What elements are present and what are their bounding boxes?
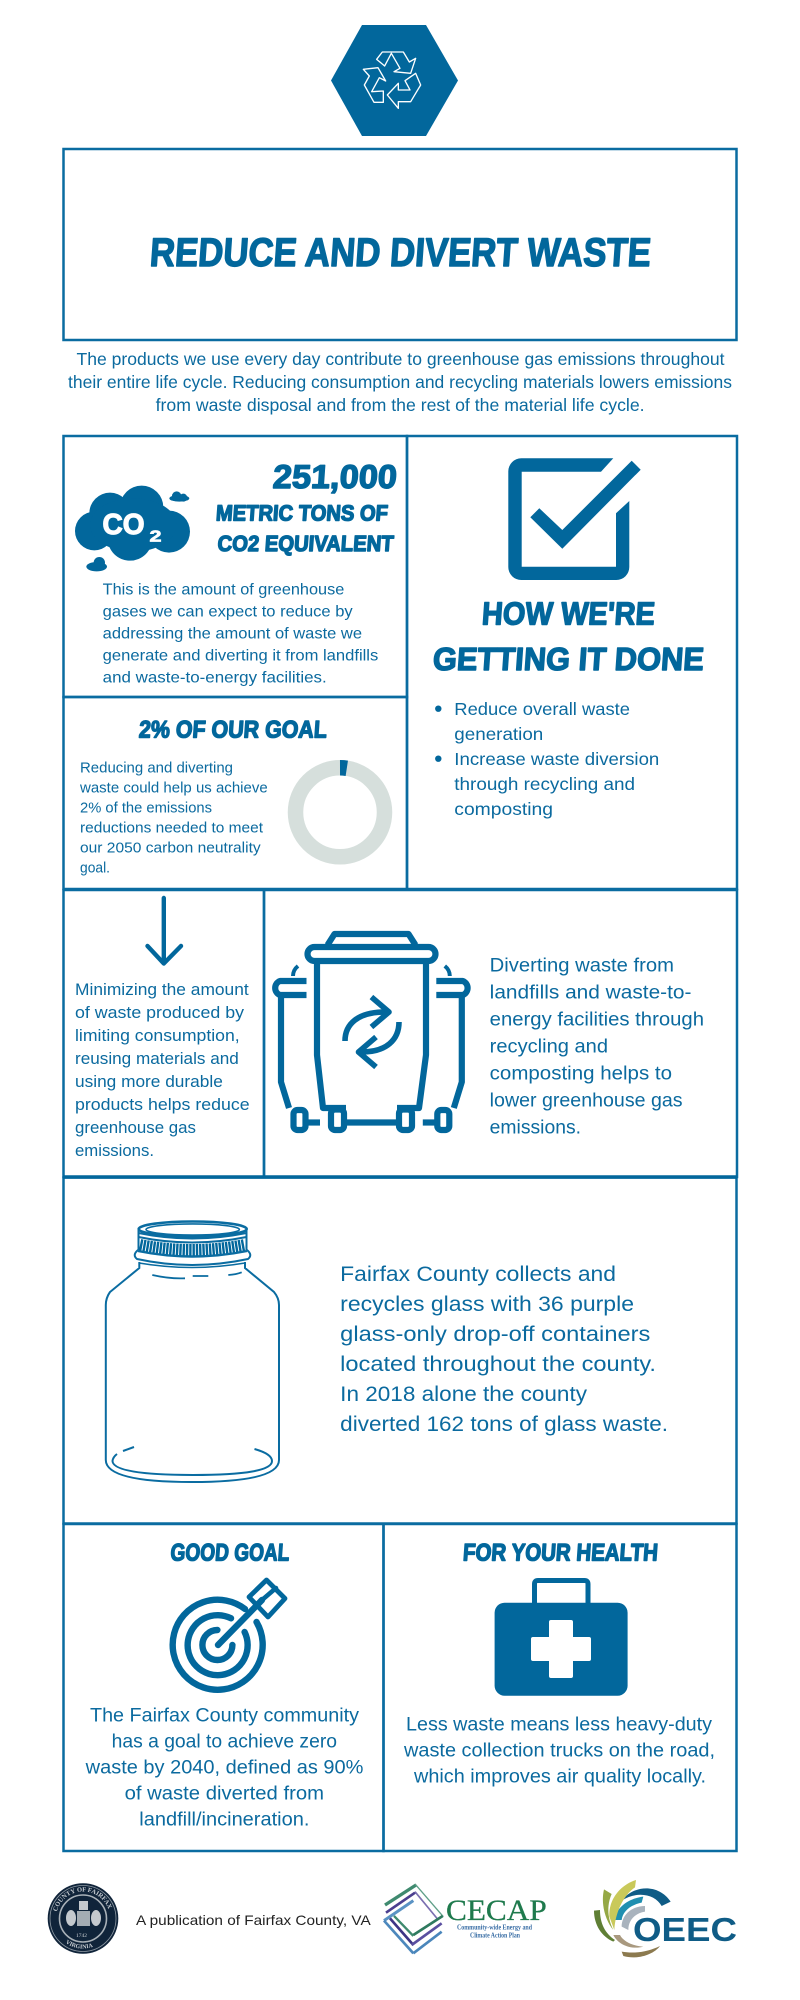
bullet list: Reduce overall waste — [454, 699, 630, 719]
chart: donut 2% — [296, 768, 384, 857]
heading: 2% OF OUR GOAL — [138, 717, 328, 744]
diverting text: landfills and waste-to- — [490, 983, 692, 1004]
bullet list: generation — [454, 724, 543, 744]
glass recycling text: In 2018 alone the county — [340, 1383, 588, 1406]
diverting text: Diverting waste from — [490, 956, 674, 977]
health text: waste collection trucks on the road, — [403, 1741, 715, 1762]
diverting text: lower greenhouse gas — [490, 1091, 683, 1112]
minimizing text: greenhouse gas — [75, 1118, 196, 1137]
health text: which improves air quality locally. — [413, 1767, 706, 1788]
diverting text: composting helps to — [490, 1064, 672, 1085]
glass recycling text: located throughout the county. — [340, 1353, 656, 1376]
stat description: This is the amount of greenhouse — [103, 581, 344, 598]
intro text: The products we use every day contribute to greenhouse gas emissions throughout — [76, 349, 725, 369]
bullet list: composting — [454, 799, 553, 819]
goal description — [79, 760, 268, 876]
minimizing text: Minimizing the amount — [75, 980, 249, 999]
minimizing text: limiting consumption, — [75, 1026, 240, 1045]
intro text: their entire life cycle. Reducing consumption and recycling materials lowers emissions — [68, 372, 732, 392]
icon: recycling hexagon — [331, 25, 458, 136]
statistic: 251,000: 251,000 — [272, 459, 398, 496]
panel: how we're getting it done — [407, 436, 737, 889]
heading: FOR YOUR HEALTH — [462, 1540, 659, 1567]
minimizing text: products helps reduce — [75, 1095, 250, 1114]
stat description: generate and diverting it from landfills — [103, 647, 378, 664]
panel: good goal — [64, 1524, 384, 1851]
stat description: addressing the amount of waste we — [103, 625, 362, 642]
glass recycling text — [340, 1263, 668, 1436]
panel: minimizing waste — [64, 890, 264, 1177]
logo: OEEC — [594, 1880, 737, 1957]
minimizing text — [75, 980, 250, 1160]
icon: glass jar — [106, 1222, 279, 1482]
heading: HOW WE'RE — [481, 595, 656, 631]
glass recycling text: glass-only drop-off containers — [340, 1323, 650, 1346]
glass recycling text: Fairfax County collects and — [340, 1263, 616, 1286]
publication credit: A publication of Fairfax County, VA — [136, 1912, 371, 1928]
stat description: gases we can expect to reduce by — [103, 604, 353, 620]
statistic unit: CO2 EQUIVALENT — [217, 531, 395, 556]
heading: GOOD GOAL — [170, 1540, 290, 1567]
logo: CECAP — [384, 1884, 547, 1953]
goal description: 2% of the emissions — [80, 800, 212, 816]
minimizing text: emissions. — [75, 1141, 154, 1160]
good goal text: landfill/incineration. — [139, 1810, 309, 1831]
icon: target with arrow — [173, 1580, 285, 1690]
goal description: waste could help us achieve — [79, 780, 268, 796]
statistic unit: METRIC TONS OF — [215, 501, 389, 526]
title panel — [64, 149, 736, 340]
bullet list: through recycling and — [454, 774, 635, 794]
diverting text: energy facilities through — [490, 1010, 704, 1031]
good goal text — [85, 1706, 364, 1831]
goal description: reductions needed to meet — [80, 820, 263, 836]
glass recycling text: diverted 162 tons of glass waste. — [340, 1413, 668, 1436]
bullet list: Increase waste diversion — [454, 749, 659, 769]
title panel: REDUCE AND DIVERT WASTE — [148, 231, 653, 275]
good goal text: has a goal to achieve zero — [112, 1732, 337, 1753]
heading — [432, 595, 705, 677]
bullet list — [435, 699, 659, 819]
minimizing text: of waste produced by — [75, 1003, 245, 1022]
diverting text: emissions. — [490, 1118, 581, 1139]
icon: recycling bins — [275, 934, 468, 1130]
statistic unit — [215, 501, 395, 556]
goal description: goal. — [80, 860, 110, 876]
stat description — [103, 581, 378, 686]
minimizing text: using more durable — [75, 1072, 223, 1091]
icon: medical kit — [495, 1580, 628, 1696]
goal description: Reducing and diverting — [80, 760, 233, 776]
panel: glass recycling — [63, 1177, 737, 1524]
intro text — [68, 349, 732, 415]
heading: GETTING IT DONE — [432, 641, 705, 677]
glass recycling text: recycles glass with 36 purple — [340, 1293, 634, 1316]
minimizing text: reusing materials and — [75, 1049, 239, 1068]
logo: CECAP: Climate Action Plan — [470, 1932, 520, 1940]
panel: for your health — [384, 1524, 736, 1851]
icon: down arrow — [148, 898, 181, 964]
logo: CECAP: CECAP — [446, 1894, 547, 1927]
icon: CO2 cloud: CO — [102, 509, 144, 541]
goal description: our 2050 carbon neutrality — [80, 840, 261, 856]
icon: CO2 cloud: 2 — [150, 529, 162, 546]
panel: 2% of our goal — [64, 697, 407, 889]
good goal text: waste by 2040, defined as 90% — [85, 1758, 364, 1779]
panel: 251,000 metric tons — [64, 436, 407, 697]
logo: Fairfax County seal: 1742 — [76, 1933, 87, 1939]
health text: Less waste means less heavy-duty — [406, 1715, 713, 1736]
logo: OEEC: OEEC — [633, 1911, 737, 1948]
diverting text — [490, 956, 704, 1139]
logo: CECAP: Community-wide Energy and — [457, 1923, 532, 1931]
good goal text: of waste diverted from — [125, 1784, 324, 1805]
stat description: and waste-to-energy facilities. — [103, 669, 327, 686]
logo: Fairfax County seal — [48, 1883, 118, 1954]
logo: Fairfax County seal: COUNTY OF FAIRFAX — [53, 1887, 112, 1911]
panel: diverting waste — [264, 890, 737, 1177]
good goal text: The Fairfax County community — [90, 1706, 360, 1727]
logo: Fairfax County seal: VIRGINIA — [67, 1940, 93, 1949]
diverting text: recycling and — [490, 1037, 608, 1058]
icon: CO2 cloud — [75, 486, 190, 571]
icon: checkbox — [508, 458, 641, 580]
intro text: from waste disposal and from the rest of the material life cycle. — [156, 395, 645, 415]
health text — [403, 1715, 715, 1788]
